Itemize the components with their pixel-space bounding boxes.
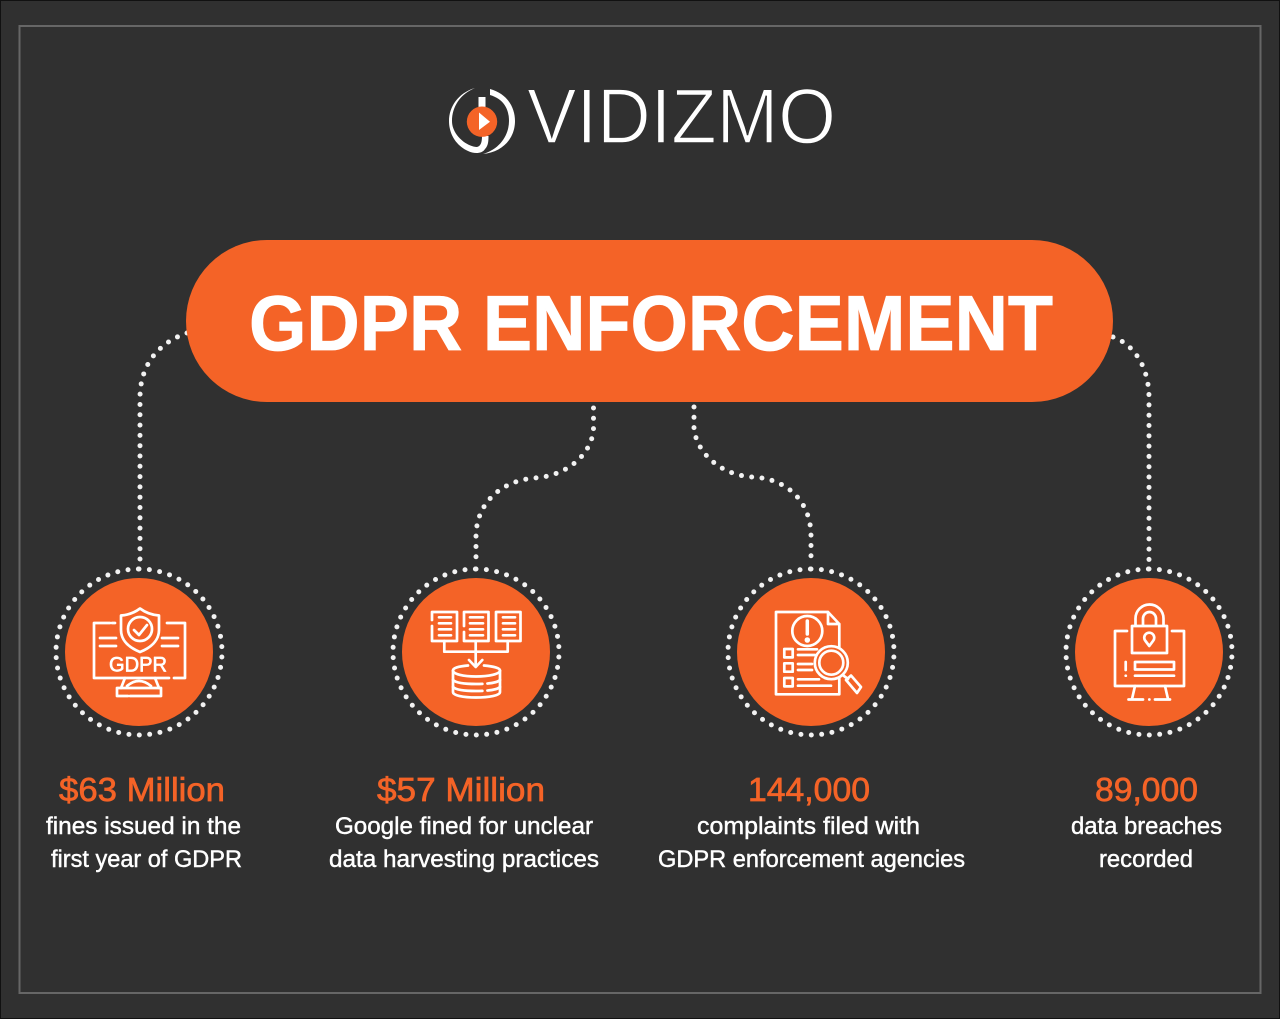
logo: VIDIZMO	[449, 72, 836, 160]
stat: $63 Million: $63 Million	[59, 771, 225, 808]
logo wordmark: VIDIZMO	[527, 72, 836, 160]
logo icon	[449, 88, 515, 154]
icon: complaint document with magnifier	[776, 612, 861, 694]
stat: $57 Million: data harvesting practices	[329, 846, 599, 873]
stat: 89,000: recorded	[1099, 846, 1193, 873]
connector: title to $57 Million	[476, 408, 594, 559]
stat: $57 Million	[329, 771, 599, 873]
title pill	[186, 240, 1113, 402]
item 1 icon badge: GDPR monitor	[56, 569, 222, 735]
icon: documents to database	[432, 612, 520, 698]
stat: $63 Million: fines issued in the	[46, 813, 241, 840]
stat: $57 Million: Google fined for unclear	[335, 813, 593, 840]
icon: GDPR monitor with shield	[94, 608, 185, 696]
stat: 144,000: GDPR enforcement agencies	[658, 846, 965, 873]
stat: 144,000: complaints filed with	[697, 813, 920, 840]
item 2 icon badge: documents to database	[393, 569, 559, 735]
stat: $63 Million	[46, 771, 242, 873]
connector: title to 144,000	[694, 407, 811, 559]
item 3 icon badge: complaint document with magnifier	[728, 569, 894, 735]
stat: $57 Million: $57 Million	[377, 771, 545, 808]
stat: 144,000	[658, 771, 965, 873]
icon: locked monitor	[1115, 604, 1184, 700]
stat: 89,000: 89,000	[1095, 771, 1198, 808]
icon: GDPR monitor with shield: GDPR	[109, 654, 167, 676]
stat: 144,000: 144,000	[748, 771, 870, 808]
connector: title to $63 Million	[140, 333, 187, 563]
item 4 icon badge: locked monitor	[1066, 569, 1232, 735]
stat: $63 Million: first year of GDPR	[51, 846, 242, 873]
stat: 89,000	[1071, 771, 1222, 873]
stat: 89,000: data breaches	[1071, 813, 1222, 840]
connector: title to 89,000	[1113, 337, 1149, 563]
title: GDPR ENFORCEMENT	[249, 279, 1053, 367]
